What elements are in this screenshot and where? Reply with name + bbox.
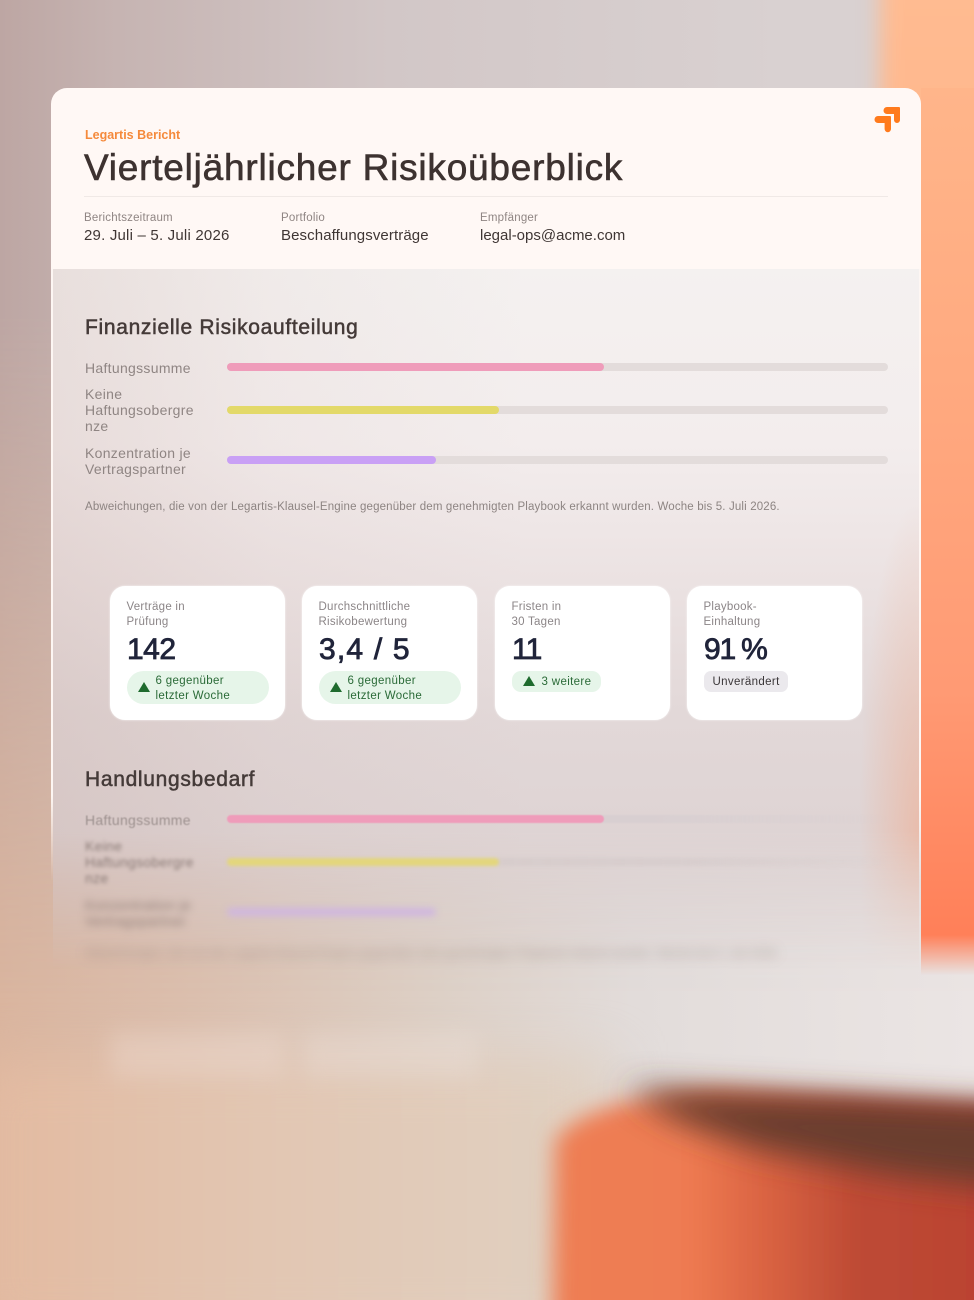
KPI card: risk: Durchschnittliche <box>318 601 410 613</box>
bar chart: financial risk <box>85 360 888 477</box>
KPI card: compliance <box>687 586 862 720</box>
row: Keine Haftungsobergrenze: Haftungsobergre <box>85 402 194 418</box>
header divider <box>84 196 888 197</box>
row: Keine Haftungsobergrenze: nze <box>85 870 108 886</box>
heading: action needed: Handlungsbedarf <box>85 768 255 791</box>
row: Konzentration <box>84 897 192 930</box>
KPI card: contracts: Prüfung <box>126 616 169 628</box>
KPI card: compliance: Playbook- <box>704 601 757 613</box>
row: Keine Haftungsobergrenze: Keine <box>85 838 122 854</box>
meta: period: 29. Juli – 5. Juli 2026 <box>84 227 230 244</box>
title: Vierteljährlicher Risikoüberblick <box>84 147 623 188</box>
row: Konzentration: Konzentration je <box>85 897 191 913</box>
KPI card: contracts: letzter Woche <box>156 690 230 702</box>
KPI card: compliance: Unverändert <box>712 676 780 688</box>
KPI card: risk <box>302 586 477 720</box>
meta: portfolio <box>281 212 429 244</box>
card shadow <box>51 92 921 882</box>
meta: recipient: legal-ops@acme.com <box>480 227 625 244</box>
row: Keine Haftungsobergrenze <box>84 838 194 886</box>
meta: recipient <box>480 212 625 244</box>
meta: period: Berichtszeitraum <box>84 212 173 224</box>
meta: portfolio: Portfolio <box>281 212 325 224</box>
KPI card: contracts: Verträge in <box>126 601 185 613</box>
row: Konzentration: Konzentration je <box>85 445 191 461</box>
KPI card: deadlines <box>495 586 670 720</box>
report card body <box>53 262 919 992</box>
meta: period <box>84 212 230 244</box>
row: Keine Haftungsobergrenze <box>85 386 194 434</box>
row: Keine Haftungsobergrenze: Haftungsobergre <box>85 854 194 870</box>
KPI card: compliance: Einhaltung <box>704 616 760 628</box>
KPI card: risk: Risikobewertung <box>318 616 407 628</box>
row: Keine Haftungsobergrenze: nze <box>85 418 108 434</box>
row: Haftungssumme: Haftungssumme <box>85 812 191 828</box>
row: Konzentration: Vertragspartner <box>85 461 186 477</box>
row: Konzentration <box>85 445 191 477</box>
row: Konzentration: Vertragspartner <box>85 913 186 929</box>
KPI card: contracts: 142 <box>127 633 176 666</box>
KPI card: risk: 6 gegenüber <box>348 675 416 687</box>
meta: recipient: Empfänger <box>480 212 538 224</box>
KPI card: contracts: 6 gegenüber <box>156 675 224 687</box>
footnote: Abweichungen, die von der Legartis-Klausel-Engine gegenüber dem genehmigten Playbook erkannt wurden. Woche bis 5. Juli 2026. <box>85 501 780 513</box>
logo icon <box>874 107 900 132</box>
KPI card: deadlines: 11 <box>512 633 542 666</box>
KPI card: deadlines: Fristen in <box>512 601 561 613</box>
row: Haftungssumme: Haftungssumme <box>85 360 191 376</box>
report card edges <box>51 262 921 882</box>
meta: portfolio: Beschaffungsverträge <box>281 227 429 244</box>
brand label: Legartis Bericht <box>85 128 180 142</box>
KPI card: compliance: 91 % <box>704 633 767 666</box>
row: Keine Haftungsobergrenze: Keine <box>85 386 122 402</box>
KPI card: risk: 3,4 / 5 <box>319 633 411 666</box>
KPI card: deadlines: 3 weitere <box>542 676 591 688</box>
KPI cards ghost (blurred) <box>110 1033 462 1077</box>
heading: financial risk: Finanzielle Risikoaufteilung <box>85 316 359 339</box>
KPI card: risk: letzter Woche <box>348 690 422 702</box>
footnote (blurred): Abweichungen, die von der Legartis-Klausel-Engine gegenüber dem genehmigten Playbook erkannt wurden. Woche bis 5. Juli 2026. <box>85 948 780 960</box>
KPI card: deadlines: 30 Tagen <box>512 616 561 628</box>
KPI card: contracts <box>110 586 285 720</box>
bar chart: action needed (blurred) <box>84 812 605 930</box>
report header panel <box>51 88 921 269</box>
